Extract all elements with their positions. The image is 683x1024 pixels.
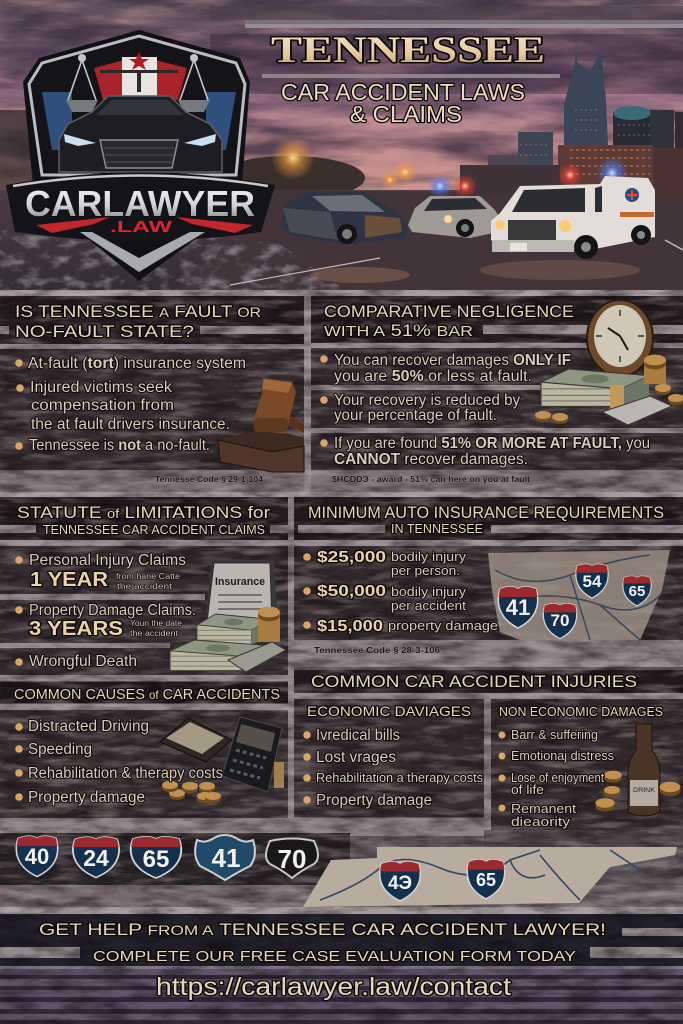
bullet list: bodily injury bbox=[391, 549, 467, 564]
bullet list: Barr & suffering bbox=[511, 728, 598, 742]
crashed car bbox=[280, 192, 408, 245]
bullet list: You can recover damages ONLY IF bbox=[334, 352, 571, 369]
heading: COMPARATIVE NEGLIGENCE bbox=[324, 302, 574, 321]
bullet list: Property damage bbox=[28, 789, 145, 806]
police car bbox=[408, 196, 502, 238]
logo: CarLawyer shield: .LAW bbox=[110, 219, 173, 236]
title: TENNESSEE bbox=[271, 30, 545, 71]
heading: COMMON CAUSES of CAR ACCIDENTS bbox=[14, 686, 280, 703]
bullet list: At-fault (tort) insurance system bbox=[28, 355, 246, 372]
texture overlay bbox=[0, 290, 683, 1024]
bullet list: CANNOT recover damages. bbox=[334, 451, 528, 468]
panel: minimum auto insurance: IN TENNESSEE bbox=[391, 521, 483, 536]
bullet list: $15,000 bbox=[317, 618, 383, 635]
shield 70: 70 bbox=[278, 844, 306, 874]
bullet list bbox=[15, 718, 223, 806]
icon: insurance document and cash: Insurance bbox=[215, 576, 265, 588]
bullet list: of life bbox=[511, 783, 544, 797]
map: Tennessee with highways: 4Э bbox=[388, 873, 412, 894]
bullet list bbox=[15, 552, 196, 670]
panel: common injuries bbox=[303, 672, 680, 829]
subheading: ECONOMIC DAVIAGES bbox=[307, 703, 471, 719]
bullet list: the accident bbox=[117, 582, 173, 591]
panel: comparative negligence bbox=[320, 300, 683, 484]
bullet list: Speeding bbox=[28, 741, 92, 758]
heading: COMMON CAR ACCIDENT INJURIES bbox=[311, 672, 637, 691]
map: Tennessee with highways bbox=[303, 847, 677, 907]
bullet list: Your recovery is reduced by bbox=[334, 392, 520, 409]
shield 40: 40 bbox=[25, 844, 49, 869]
icon: cash and coins bbox=[535, 355, 683, 425]
title: CAR ACCIDENT LAWS bbox=[281, 79, 525, 105]
panel: statute of limitations: TENNESSEE CAR ACCIDENT CLAIMS bbox=[43, 522, 265, 537]
highway shields bbox=[498, 564, 651, 639]
bullet list: compensation from bbox=[31, 397, 174, 414]
call to action: GET HELP FROM A TENNESSEE CAR ACCIDENT LAWYER! bbox=[39, 920, 606, 939]
panel: highway shields row bbox=[16, 835, 677, 907]
highway shields: 54 bbox=[583, 572, 602, 591]
citation: $HCDDЭ - award - 51% can here on you at fault bbox=[332, 474, 530, 484]
panel: statute of limitations bbox=[15, 503, 286, 672]
bullet list: Youn the date bbox=[130, 619, 183, 628]
logo: CarLawyer shield bbox=[6, 30, 275, 281]
panel: header scene bbox=[0, 0, 683, 290]
citation: Tennesse Code § 29-1-104 bbox=[155, 474, 263, 484]
bullet list: Remanent bbox=[511, 802, 577, 816]
bullet list bbox=[320, 352, 650, 468]
highway shields: 65 bbox=[629, 583, 645, 600]
url: https://carlawyer.law/contact bbox=[156, 973, 511, 1001]
call to action: COMPLETE OUR FREE CASE EVALUATION FORM TODAY bbox=[93, 948, 576, 965]
bullet list: Lost vrages bbox=[316, 749, 396, 766]
bullet list: Lose of enjoyment bbox=[511, 771, 604, 785]
bullet list: Emotionaj distress bbox=[511, 749, 614, 763]
bullet list: the at fault drivers insurance. bbox=[31, 416, 230, 433]
panel: minimum auto insurance bbox=[303, 503, 670, 655]
icon: insurance document and cash bbox=[170, 560, 286, 672]
bullet list: 1 YEAR bbox=[30, 569, 109, 591]
call to action bbox=[39, 920, 606, 1001]
map: Tennessee bbox=[488, 550, 670, 640]
panel: common causes bbox=[14, 686, 284, 806]
bullet list: $25,000 bbox=[317, 549, 386, 566]
icon: bottle and coins: DRINK bbox=[633, 788, 655, 794]
shield 41 bbox=[195, 835, 255, 880]
shield 24: 24 bbox=[83, 845, 109, 871]
skyline bbox=[460, 38, 683, 196]
logo wordmark: CARLAWYER bbox=[25, 183, 255, 224]
bullet list: bodily injury bbox=[391, 584, 467, 599]
icon: papers, calculator and coins bbox=[160, 717, 284, 803]
bullet list: per person. bbox=[391, 563, 460, 578]
bullet list: Wrongful Death bbox=[29, 653, 137, 670]
subheading: NON ECONOMIC DAMAGES bbox=[499, 704, 663, 719]
icon: bottle and coins bbox=[595, 724, 680, 816]
icon: clock bbox=[587, 300, 653, 376]
bullet list: Property Damage Claims. bbox=[29, 602, 196, 619]
heading: MINIMUM AUTO INSURANCE REQUIREMENTS bbox=[308, 503, 664, 522]
shield 70 bbox=[266, 838, 318, 878]
panel: fault or no-fault bbox=[15, 302, 304, 484]
shield 41: 41 bbox=[212, 843, 240, 873]
bullet list: from hane Catte bbox=[116, 572, 181, 581]
shield 65: 65 bbox=[143, 846, 169, 873]
bullet list: you are 50% or less at fault. bbox=[334, 368, 532, 385]
title: & CLAIMS bbox=[350, 101, 462, 127]
heading: IS TENNESSEE A FAULT OR bbox=[15, 302, 261, 321]
bullet list: dieaority bbox=[511, 815, 571, 829]
citation: Tennessee Code § 28-3-106 bbox=[314, 645, 440, 655]
bottom stripes bbox=[0, 975, 683, 1024]
title bbox=[262, 30, 560, 127]
bullet list: If you are found 51% OR MORE AT FAULT, you bbox=[334, 435, 650, 452]
bullet list bbox=[498, 728, 614, 829]
street lights bbox=[271, 136, 628, 198]
bullet list: Distracted Driving bbox=[28, 718, 149, 735]
shield 65 bbox=[131, 837, 181, 878]
bullet list bbox=[15, 355, 246, 454]
highway shields: 70 bbox=[551, 611, 569, 630]
light strips bbox=[0, 325, 683, 969]
bullet list bbox=[303, 727, 483, 809]
panel: non economic damages bbox=[498, 704, 680, 829]
map: Tennessee with highways: 65 bbox=[476, 870, 496, 890]
highway shields: 41 bbox=[506, 595, 530, 620]
ambulance bbox=[491, 176, 655, 259]
bullet list: Injured victims seek bbox=[30, 379, 172, 396]
panel: comparative negligence: WITH A 51% BAR bbox=[324, 321, 473, 340]
bullet list: Personal Injury Claims bbox=[29, 552, 186, 569]
bullet list: the accident bbox=[130, 629, 179, 638]
bullet list: Tennessee is not a no-fault. bbox=[29, 437, 210, 454]
icon: gavel and book bbox=[218, 378, 304, 472]
bullet list: your percentage of fault. bbox=[334, 407, 497, 424]
bullet list: property damage bbox=[388, 618, 498, 633]
panels: base layer bbox=[0, 290, 683, 1024]
heading: STATUTE of LIMITATIONS for bbox=[17, 503, 270, 522]
shield 24 bbox=[73, 837, 119, 878]
shield 40 bbox=[16, 836, 58, 877]
panel: fault or no-fault: NO-FAULT STATE? bbox=[15, 322, 194, 341]
bullet list: Property damage bbox=[316, 792, 432, 809]
bullet list: Rehabilitation & therapy costs bbox=[28, 765, 223, 782]
bullet list: $50,000 bbox=[317, 583, 386, 600]
bullet list bbox=[303, 549, 498, 635]
bullet list: Ivredical bills bbox=[316, 727, 400, 744]
bullet list: Rehabilitation a therapy costs bbox=[316, 770, 483, 785]
bullet list: per accident bbox=[391, 598, 466, 613]
top strips bbox=[210, 6, 683, 28]
bullet list: 3 YEARS bbox=[29, 618, 123, 640]
panel: economic damages bbox=[303, 703, 483, 809]
